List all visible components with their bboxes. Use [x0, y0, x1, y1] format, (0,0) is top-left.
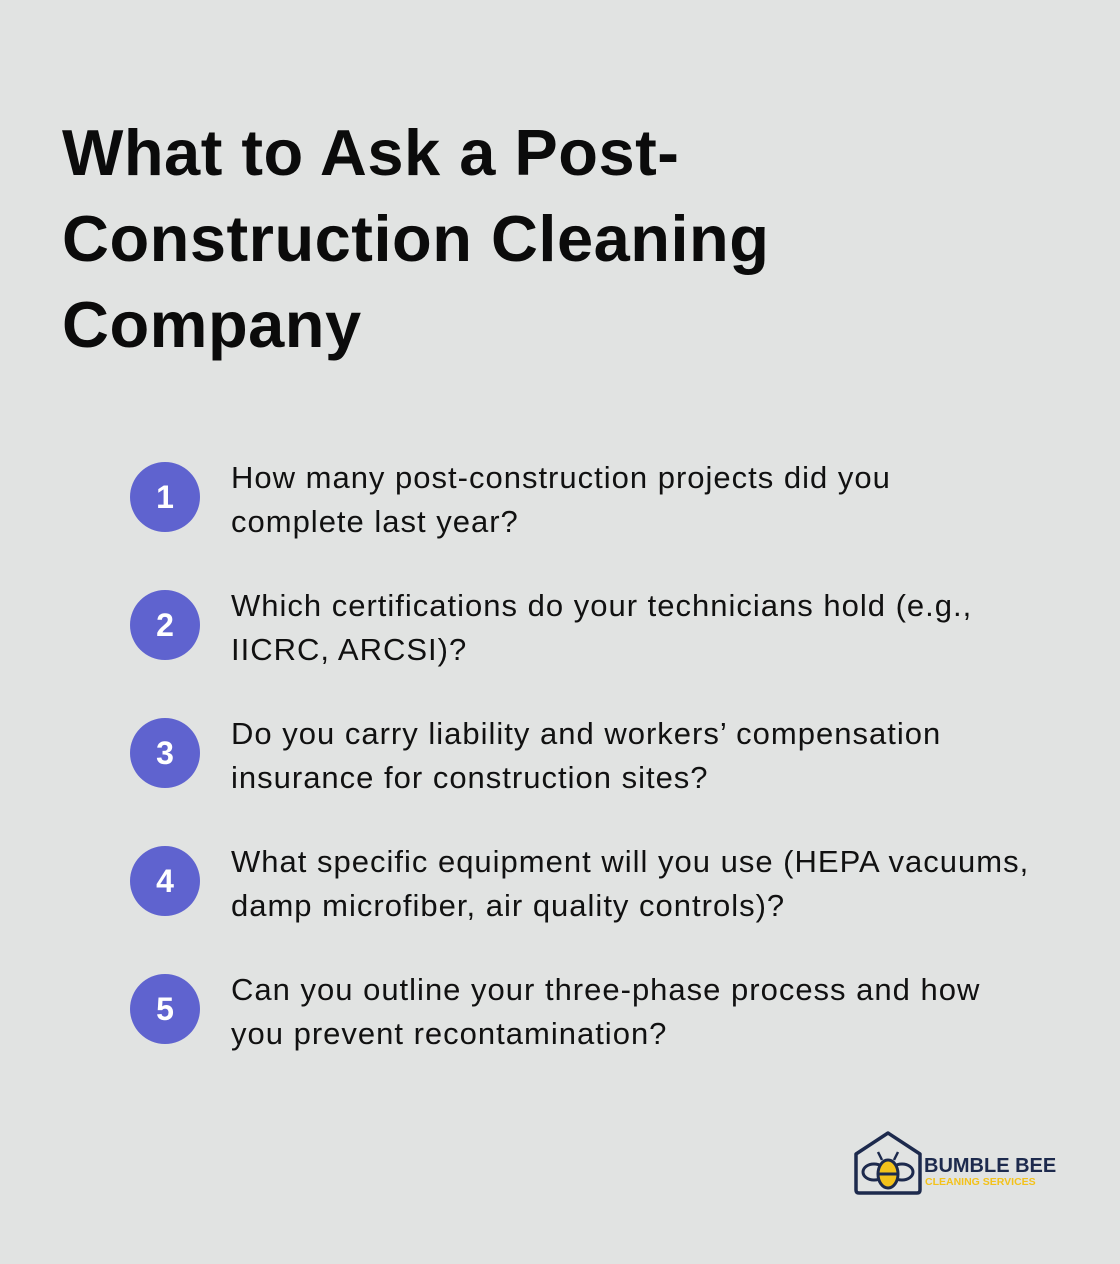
question 2	[231, 588, 972, 667]
question 5: you prevent recontamination?	[231, 1016, 667, 1051]
badge 2: 2	[156, 607, 174, 643]
badge 4: 4	[156, 863, 174, 899]
badge 1	[130, 462, 200, 532]
badge 3	[130, 718, 200, 788]
badge 5	[130, 974, 200, 1044]
item 3	[130, 716, 941, 795]
question 1: How many post-construction projects did you	[231, 460, 891, 495]
item 5	[130, 972, 980, 1051]
question 4: What specific equipment will you use (HEPA vacuums,	[231, 844, 1029, 879]
question 3	[231, 716, 941, 795]
brand name: BUMBLE BEE	[924, 1155, 1056, 1177]
title: What to Ask a Post-	[62, 116, 679, 189]
question 3: insurance for construction sites?	[231, 760, 709, 795]
badge 3: 3	[156, 735, 174, 771]
item 2	[130, 588, 972, 667]
question 1: complete last year?	[231, 504, 519, 539]
item 1	[130, 460, 891, 539]
badge 4	[130, 846, 200, 916]
question 5	[231, 972, 980, 1051]
question 1	[231, 460, 891, 539]
title: Company	[62, 288, 362, 361]
title: Construction Cleaning	[62, 202, 769, 275]
question 5: Can you outline your three-phase process and how	[231, 972, 980, 1007]
badge 5: 5	[156, 991, 174, 1027]
logo	[854, 1131, 1056, 1195]
badge 2	[130, 590, 200, 660]
question 2: IICRC, ARCSI)?	[231, 632, 467, 667]
question 3: Do you carry liability and workers’ compensation	[231, 716, 941, 751]
item 4	[130, 844, 1029, 923]
question 4	[231, 844, 1029, 923]
question 4: damp microfiber, air quality controls)?	[231, 888, 785, 923]
brand tagline: CLEANING SERVICES	[925, 1176, 1036, 1188]
question 2: Which certifications do your technicians hold (e.g.,	[231, 588, 972, 623]
badge 1: 1	[156, 479, 174, 515]
icon: bee house	[854, 1131, 922, 1195]
title	[62, 116, 769, 361]
